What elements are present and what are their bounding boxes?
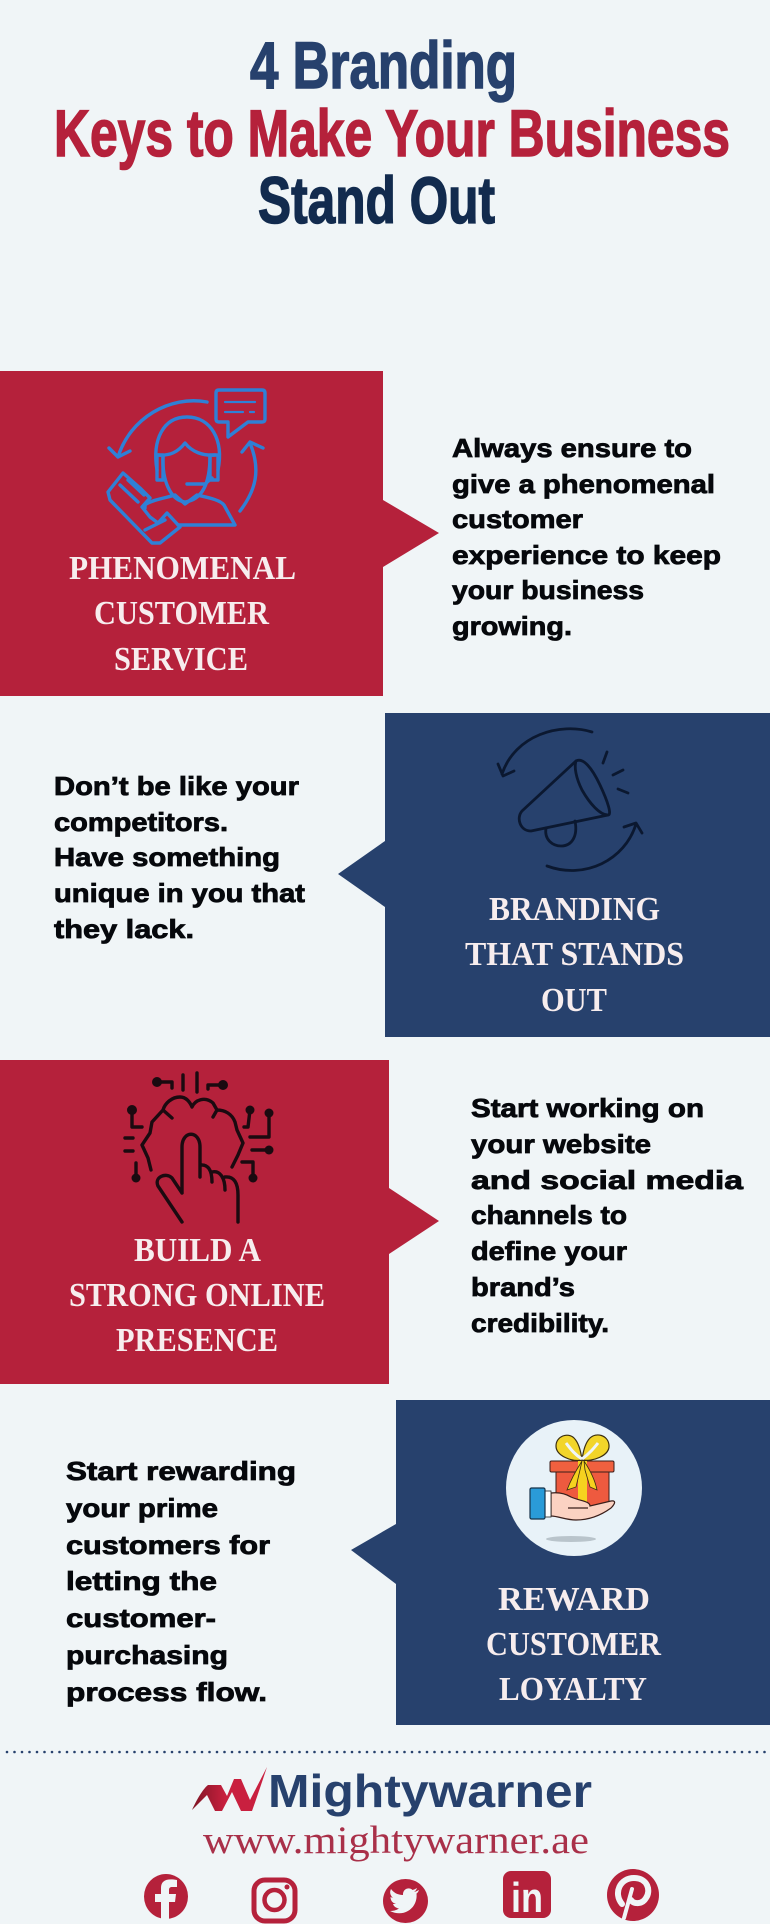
text block: reward prime customers: purchasing: [66, 1640, 228, 1670]
text block: reward prime customers: customer-: [66, 1603, 216, 1633]
text block: customer experience: give a phenomenal: [452, 469, 715, 499]
icon: pinterest: [607, 1869, 659, 1921]
heading: LOYALTY: [499, 1671, 647, 1708]
heading: THAT STANDS: [465, 936, 684, 973]
text block: website and social: [471, 1093, 744, 1338]
text block: website and social: Start working on: [471, 1093, 704, 1123]
panel: branding that stands out: [338, 713, 770, 1037]
heading: [486, 1581, 661, 1708]
logo: Mightywarner: Mightywarner: [268, 1765, 592, 1817]
panel: reward customer loyalty: [351, 1400, 770, 1725]
text block: reward prime customers: Start rewarding: [66, 1456, 296, 1486]
text block: be unique: Have something: [54, 842, 280, 872]
text block: customer experience: customer: [452, 504, 583, 534]
heading: PHENOMENAL: [69, 550, 296, 587]
text block: customer experience: experience to keep: [452, 540, 721, 570]
text block: be unique: competitors.: [54, 807, 228, 837]
heading: [69, 550, 296, 678]
text block: website and social: credibility.: [471, 1308, 609, 1338]
text block: reward prime customers: process flow.: [66, 1677, 267, 1707]
text block: be unique: Don’t be like your: [54, 771, 299, 801]
text block: customer experience: Always ensure to: [452, 433, 692, 463]
text block: be unique: [54, 771, 305, 944]
icon: linkedin: in: [511, 1874, 543, 1921]
text block: website and social: brand’s: [471, 1272, 575, 1302]
icon: megaphone: [498, 729, 642, 870]
text block: customer experience: your business: [452, 575, 644, 605]
heading: CUSTOMER: [486, 1626, 661, 1663]
heading: BUILD A: [134, 1232, 261, 1269]
icon: twitter: [383, 1879, 428, 1923]
text block: website and social: your website: [471, 1129, 651, 1159]
icon: logo mark: [192, 1767, 267, 1811]
icon: brain and pointing hand: [125, 1073, 269, 1222]
title: Stand Out: [258, 163, 495, 237]
heading: [465, 891, 684, 1019]
text block: be unique: unique in you that: [54, 878, 305, 908]
website url: www.mightywarner.ae: [203, 1819, 589, 1862]
heading: BRANDING: [489, 891, 660, 928]
icon: facebook: [144, 1874, 188, 1919]
heading: STRONG ONLINE: [69, 1277, 325, 1314]
heading: CUSTOMER: [94, 595, 269, 632]
text block: customer experience: [452, 433, 721, 641]
title: 4 Branding: [250, 28, 517, 102]
text block: reward prime customers: your prime: [66, 1493, 218, 1523]
heading: REWARD: [498, 1581, 650, 1618]
heading: [69, 1232, 325, 1359]
text block: website and social: and social media: [471, 1165, 744, 1195]
text block: reward prime customers: letting the: [66, 1566, 217, 1596]
icon: customer service agent: [108, 390, 265, 543]
icon: instagram: [254, 1880, 295, 1921]
text block: reward prime customers: [66, 1456, 296, 1707]
panel: phenomenal customer service: [0, 371, 439, 696]
heading: OUT: [541, 982, 607, 1019]
text block: be unique: they lack.: [54, 914, 194, 944]
heading: SERVICE: [114, 641, 248, 678]
text block: reward prime customers: customers for: [66, 1530, 270, 1560]
icon: gift on hand: [506, 1420, 642, 1556]
heading: PRESENCE: [116, 1322, 278, 1359]
text block: customer experience: growing.: [452, 611, 572, 641]
panel: build a strong online presence: [0, 1060, 439, 1384]
text block: website and social: define your: [471, 1236, 627, 1266]
title: [54, 28, 730, 237]
text block: website and social: channels to: [471, 1200, 627, 1230]
